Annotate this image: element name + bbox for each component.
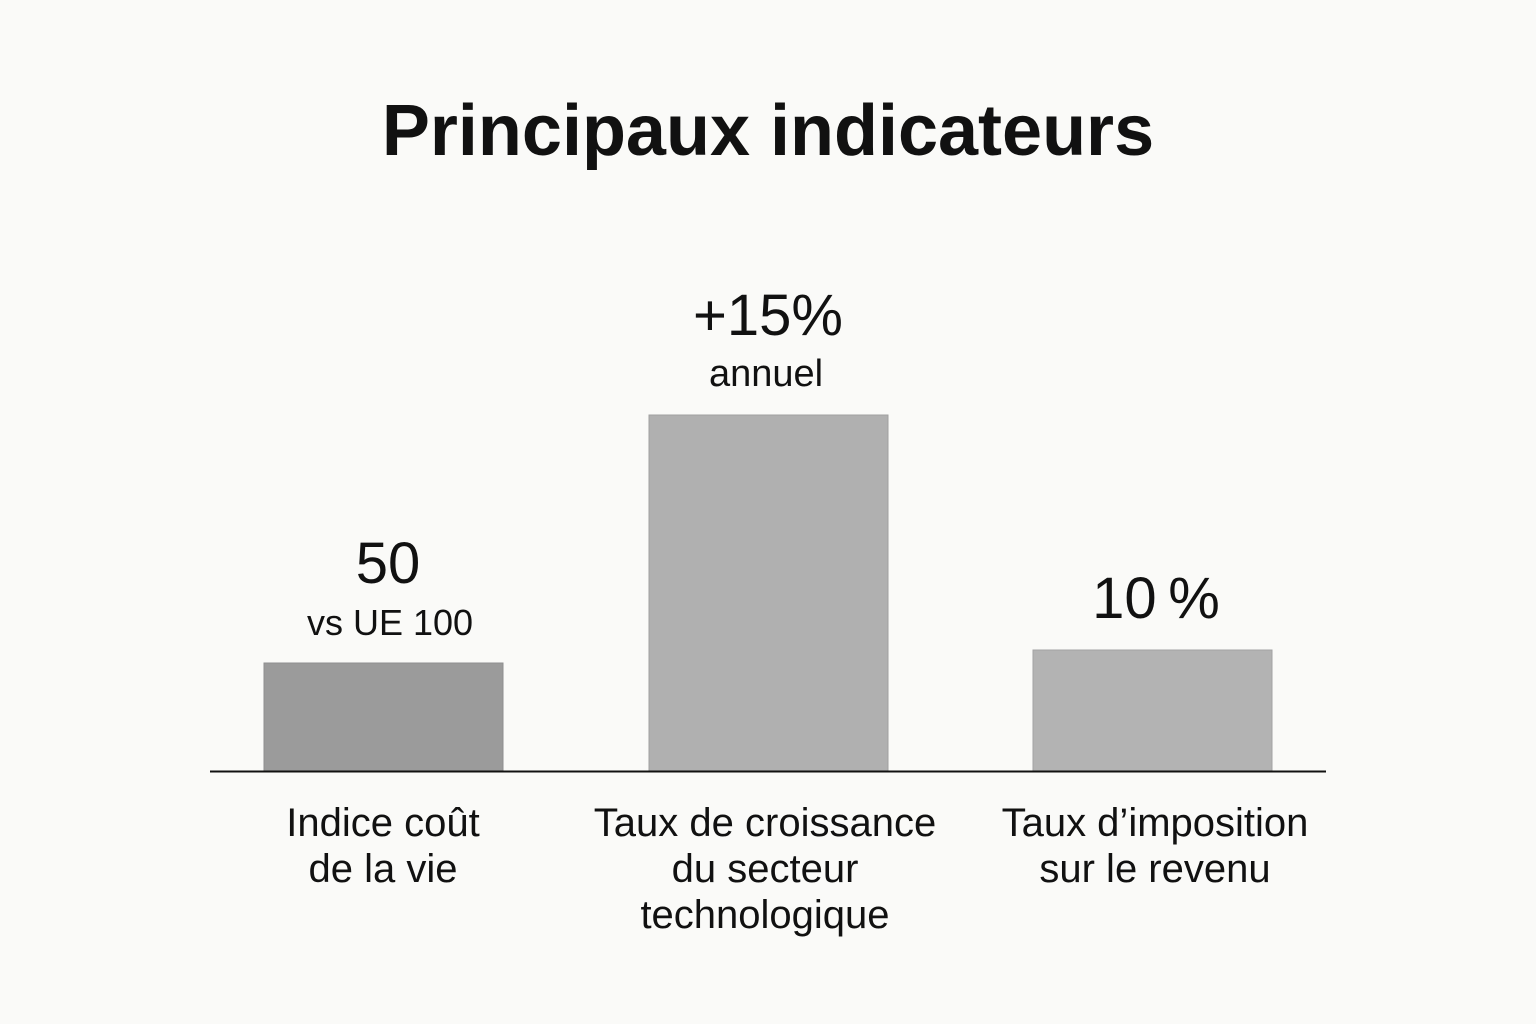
bar: tech growth: +15% [693, 283, 843, 348]
bar: cost of living: vs UE 100 [307, 602, 473, 643]
label: tech growth: du secteur [672, 847, 858, 891]
bar: income tax: 10 % [1092, 566, 1220, 631]
bar chart [210, 283, 1326, 772]
bar: tech growth: annuel [709, 353, 823, 395]
bar: tech growth [649, 283, 888, 771]
baseline axis [210, 770, 1326, 772]
label: income tax: sur le revenu [1039, 847, 1271, 891]
label: tech growth: Taux de croissance [594, 801, 936, 845]
label: cost of living: Indice coût [286, 801, 480, 845]
bar: cost of living: 50 [356, 531, 420, 596]
label: tech growth: technologique [640, 893, 890, 937]
bar: income tax [1033, 566, 1272, 771]
label: income tax: Taux d’imposition [1002, 801, 1308, 845]
label: cost of living: de la vie [309, 847, 457, 891]
title: Principaux indicateurs [382, 91, 1154, 171]
bar: cost of living [264, 531, 503, 771]
category labels [286, 801, 1308, 937]
